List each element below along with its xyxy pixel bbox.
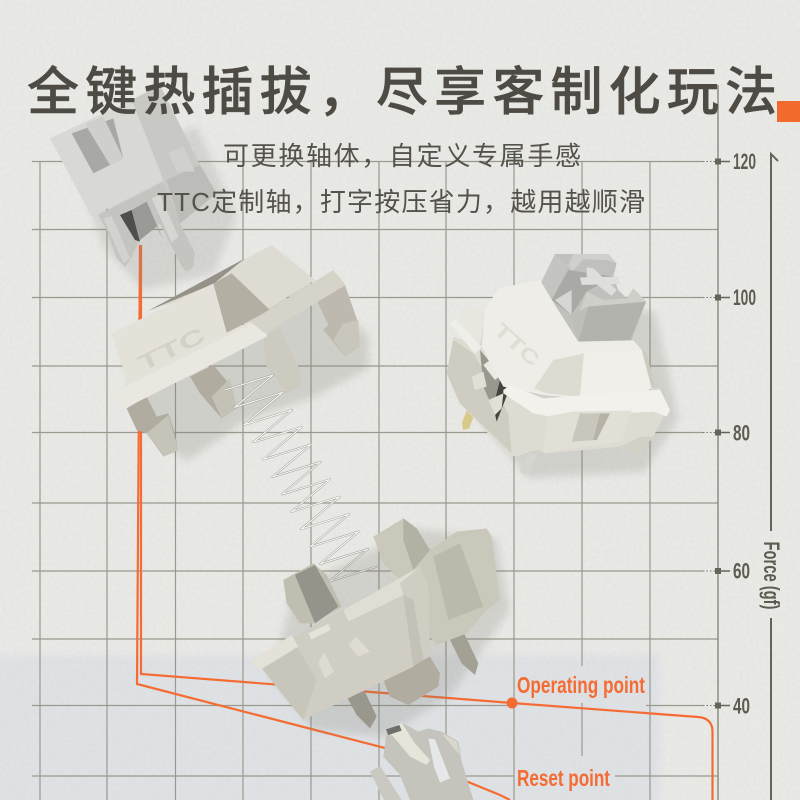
operating point label: Operating point [517, 672, 645, 698]
exploded part: grey stem [50, 85, 237, 290]
axis tick labels: 40 [733, 694, 750, 718]
exploded part: metal contact [370, 723, 473, 800]
axis tick labels: 60 [733, 558, 750, 584]
reset point label: Reset point [517, 765, 610, 791]
axis tick labels [733, 149, 756, 718]
orange force curve [137, 245, 712, 800]
assembled switch [447, 254, 678, 478]
axis tick labels: 80 [733, 420, 750, 446]
title: 全键热插拔，尽享客制化玩法 [27, 64, 777, 122]
axis tick labels: 120 [733, 149, 756, 174]
embossed TTC mark: TTC [489, 319, 544, 371]
exploded part: bottom housing [249, 518, 510, 737]
force axis [703, 85, 730, 800]
stem in switch [537, 254, 646, 342]
subtitle line 2: TTC定制轴，打字按压省力，越用越顺滑 [157, 187, 645, 217]
force axis title with arrow: Force (gf) [759, 542, 784, 610]
small orange mark: TTC [702, 89, 708, 101]
axis tick labels: 100 [733, 285, 756, 310]
force chart grid [32, 161, 718, 800]
exploded part: spring [225, 375, 378, 581]
embossed TTC mark: TTC [134, 322, 209, 376]
subtitle line 1: 可更换轴体，自定义专属手感 [223, 141, 581, 171]
icon: gold pin [462, 407, 475, 430]
orange accent square [777, 101, 800, 122]
exploded part: top housing [110, 245, 369, 462]
operating point marker [506, 698, 518, 708]
force axis title with arrow [759, 154, 784, 800]
